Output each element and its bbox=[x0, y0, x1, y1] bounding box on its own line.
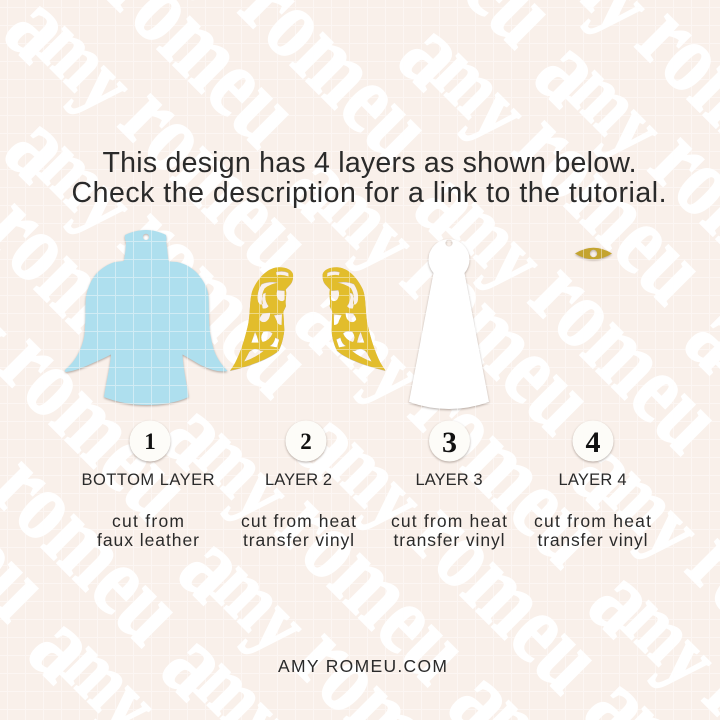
column 4: layer 4: transfer vinyl bbox=[538, 530, 648, 550]
column 1: bottom layer bbox=[82, 420, 215, 550]
watermark pattern: amy romeu: a bbox=[568, 543, 682, 656]
watermark pattern: amy romeu: my bbox=[304, 156, 435, 288]
watermark pattern: amy romeu: romeu bbox=[391, 352, 626, 587]
column 3: layer 3: cut from heat bbox=[391, 511, 507, 531]
column 3: layer 3 bbox=[391, 420, 507, 550]
watermark pattern: amy romeu: my bbox=[179, 406, 310, 538]
title: This design has 4 layers as shown below. bbox=[102, 147, 636, 179]
column 1: bottom layer: cut from bbox=[112, 511, 184, 531]
layer 2 shape: right gold wing bbox=[323, 267, 386, 371]
column 2: layer 2 bbox=[241, 420, 356, 550]
column 2: layer 2: transfer vinyl bbox=[243, 530, 354, 550]
layer 4 shape: gold eye bbox=[575, 248, 612, 259]
column 4: layer 4: 4 bbox=[586, 426, 600, 459]
column 3: layer 3: 3 bbox=[442, 426, 457, 459]
watermark pattern: amy romeu: my bbox=[432, 175, 563, 307]
watermark pattern: amy romeu: a bbox=[158, 509, 272, 622]
watermark pattern: amy romeu: a bbox=[514, 13, 628, 126]
watermark pattern: amy romeu: my bbox=[552, 43, 683, 175]
watermark pattern: amy romeu: romeu bbox=[101, 182, 336, 417]
column 3: layer 3: LAYER 3 bbox=[416, 471, 482, 489]
title bbox=[72, 147, 666, 209]
watermark pattern: amy romeu: my bbox=[416, 26, 547, 158]
column 4: layer 4 bbox=[534, 420, 651, 550]
watermark pattern: amy romeu: romeu bbox=[391, 478, 626, 713]
watermark pattern: amy romeu: my bbox=[22, 119, 153, 251]
watermark pattern: amy romeu: a bbox=[8, 589, 122, 702]
watermark pattern: amy romeu: a bbox=[266, 126, 380, 239]
layer 1 shape: blue angel bbox=[65, 230, 227, 405]
footer brand: AMY ROMEU.COM bbox=[278, 656, 447, 676]
title: Check the description for a link to the tutorial. bbox=[72, 177, 666, 209]
watermark pattern: amy romeu: a bbox=[394, 145, 508, 258]
watermark pattern: amy romeu: a bbox=[274, 259, 388, 372]
layer 3 shape: white tapered body bbox=[409, 239, 489, 409]
column 4: layer 4: LAYER 4 bbox=[558, 471, 626, 489]
column 2: layer 2: cut from heat bbox=[241, 511, 356, 531]
column 1: bottom layer: faux leather bbox=[97, 530, 199, 550]
watermark pattern: amy romeu: a bbox=[274, 385, 388, 498]
watermark pattern: amy romeu: a bbox=[141, 376, 255, 489]
column 1: bottom layer: BOTTOM LAYER bbox=[82, 471, 215, 489]
watermark pattern: amy romeu: my bbox=[22, 0, 153, 131]
column 4: layer 4: cut from heat bbox=[534, 511, 651, 531]
watermark pattern: amy romeu: romeu bbox=[101, 62, 336, 297]
watermark pattern: amy romeu: my bbox=[312, 415, 443, 547]
watermark pattern: amy romeu: romeu bbox=[383, 219, 618, 454]
watermark pattern: amy romeu: my bbox=[196, 539, 327, 671]
watermark pattern: amy romeu: a bbox=[141, 606, 255, 719]
watermark pattern: amy romeu: a bbox=[551, 414, 665, 527]
watermark pattern: amy romeu: my bbox=[589, 444, 720, 576]
column 3: layer 3: transfer vinyl bbox=[394, 530, 504, 550]
column 1: bottom layer: 1 bbox=[144, 429, 156, 454]
watermark pattern: amy romeu: my bbox=[312, 289, 443, 421]
watermark pattern: amy romeu: romeu bbox=[258, 469, 493, 704]
layer 2 shape: left gold wing bbox=[230, 267, 293, 371]
column 2: layer 2: LAYER 2 bbox=[265, 471, 332, 489]
column 2: layer 2: 2 bbox=[300, 429, 312, 454]
